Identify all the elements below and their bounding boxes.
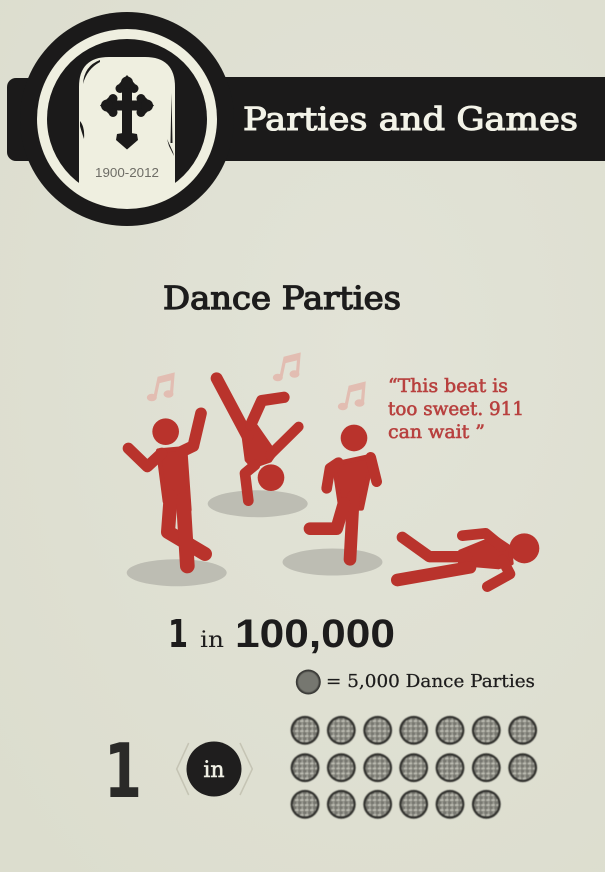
quote text: can wait ” <box>388 422 485 443</box>
legend <box>296 670 535 694</box>
heading: dance parties: Dance Parties <box>163 279 401 317</box>
legend label: = 5,000 Dance Parties <box>326 671 535 692</box>
quote text: too sweet. 911 <box>388 399 524 420</box>
statistic: 1 in 100,000: 1 <box>168 612 188 656</box>
figure: dancer one <box>128 413 205 566</box>
statistic: 1 in 100,000 <box>168 612 395 656</box>
icon: cross <box>100 75 154 150</box>
figure: dancer three <box>310 425 377 559</box>
disco ball grid <box>291 716 537 819</box>
medallion inner circle <box>47 39 207 199</box>
quote text: “This beat is <box>388 376 508 397</box>
quote text <box>388 376 524 443</box>
banner left tab <box>7 78 67 161</box>
legend ball fill <box>298 672 319 692</box>
brackets around in <box>177 743 252 795</box>
medallion outer circle <box>20 12 234 226</box>
figure: dancer two handstand <box>217 378 299 501</box>
in badge <box>186 742 242 796</box>
banner title: Parties and Games <box>243 100 578 138</box>
icon: legend disco ball <box>296 670 321 694</box>
figure: fallen dancer <box>397 533 539 587</box>
music notes <box>147 354 364 410</box>
tombstone dates: 1900-2012 <box>95 166 159 180</box>
in badge: in <box>203 758 225 783</box>
big number 1: 1 <box>104 727 142 815</box>
medallion cream ring <box>37 29 217 209</box>
floor shadows <box>127 490 382 586</box>
statistic: 1 in 100,000: 100,000 <box>235 612 395 656</box>
icon: tombstone <box>79 57 175 199</box>
banner band <box>200 77 605 161</box>
header banner <box>7 12 605 226</box>
statistic: 1 in 100,000: in <box>200 628 224 653</box>
